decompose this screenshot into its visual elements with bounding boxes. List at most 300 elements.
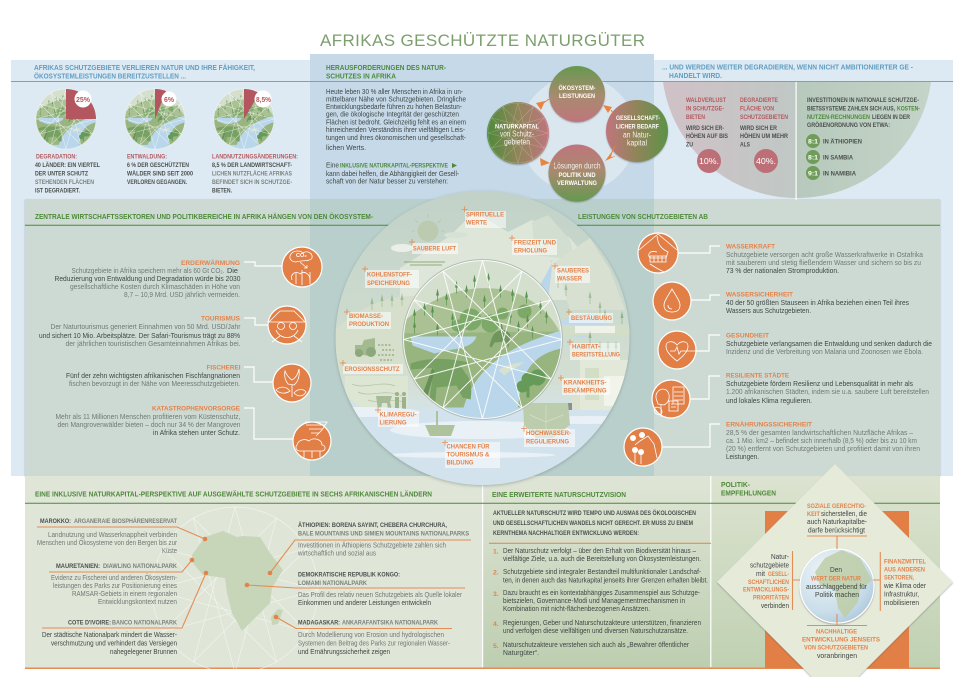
- label: climate regulation: [375, 407, 419, 427]
- sector: water security: 40 der 50 größten Stauseen in Afrika beziehen einen Teil ihres: [726, 298, 909, 307]
- case: Mauritania: [49, 558, 194, 606]
- body text: Flächen ist bedroht. Gleichzeitig fehlt es an einem: [326, 118, 466, 126]
- body text: [326, 87, 466, 186]
- case: DR Congo: Das Profil des relativ neuen Schutzgebiets als Quelle lokaler: [298, 590, 462, 599]
- ratio: Zambia: [806, 150, 853, 164]
- case: Morocco: ARGANERAIE BIOSPHÄRENRESERVAT: [74, 518, 177, 525]
- sector: climate change: [54, 247, 322, 299]
- recommendation: financing: mobilisieren: [884, 598, 919, 607]
- sector: disaster preparedness: [56, 406, 331, 460]
- case: Ivory Coast: COTE D'IVOIRE:: [68, 620, 111, 626]
- stat: degraded area 40%: [740, 97, 788, 173]
- label: pollination: [566, 309, 613, 323]
- sector: resilient cities: [652, 372, 929, 418]
- body text: mittelbarer Nähe von Schutzgebieten. Dringliche: [326, 95, 466, 104]
- case: DR Congo: [245, 572, 465, 607]
- case: Ethiopia: ÄTHIOPIEN: BORENA SAYINT, CHEBERA CHURCHURA,: [298, 522, 447, 529]
- right sectors column: [624, 233, 932, 466]
- item 2: 2.: [493, 570, 499, 576]
- item 3: Dazu braucht es ein kontextabhängiges Zusammenspiel aus Schutzge-: [503, 588, 700, 597]
- sector: climate change: Die: [227, 266, 238, 275]
- caption: deforestation: ENTWALDUNG:: [127, 154, 167, 160]
- sector: health: Schutzgebiete verlangsamen die Entwaldung und senken dadurch die: [726, 339, 932, 348]
- recommendation: development priorities: SCHAFTLICHEN: [748, 579, 789, 586]
- label: erosion protection: [340, 360, 403, 374]
- sector: hydropower: 73 % der nationalen Stromproduktion.: [726, 266, 839, 275]
- item 3: bietszielen, Governance-Modi und Managementmechanismen in: [503, 596, 685, 605]
- node: societal need: LICHER BEDARF: [616, 124, 659, 130]
- node: ecosystem services: ÖKOSYSTEM-: [558, 83, 596, 92]
- label: habitat: BEREITSTELLUNG: [572, 352, 620, 358]
- item 2: ten, in denen auch das Naturkapital jenseits ihrer Grenzen erhalten bleibt.: [503, 576, 708, 584]
- recommendation: financing: wie Klima oder: [883, 581, 926, 590]
- intro text: UND GESELLSCHAFTLICHEN WANDELS NICHT GERECHT. ER MUSS ZU EINEM: [493, 520, 693, 527]
- node: natural capital: NATURKAPITAL: [495, 124, 539, 131]
- map of Africa: [192, 531, 283, 631]
- heading: SCHUTZES IN AFRIKA: [326, 72, 396, 80]
- case: DR Congo: Einkommen und anderer Leistungen entwickeln: [298, 598, 431, 607]
- pie chart: deforestation 6%: [125, 89, 186, 150]
- label: climate regulation: KLIMAREGU-: [380, 412, 416, 419]
- inner circle landscape: [402, 260, 564, 422]
- case: Mauritania: DIAWLING NATIONALPARK: [103, 563, 177, 570]
- label: recreation: FREIZEIT UND: [514, 240, 556, 247]
- label: clean air: [409, 239, 458, 254]
- node: ecosystem services: LEISTUNGEN: [559, 93, 595, 100]
- globe: ausschlaggebend für: [806, 582, 867, 591]
- stat: forest loss 10%: WALDVERLUST: [686, 97, 726, 104]
- caption: land use change: [212, 152, 298, 194]
- caption: land use change: 8,5 % DER LANDWIRTSCHAFT-: [212, 162, 292, 169]
- label: biomass: PRODUKTION: [349, 321, 389, 328]
- sector: water security: [653, 282, 909, 320]
- icon: crops: [624, 428, 662, 466]
- label: disease control: KRANKHEITS-: [564, 380, 606, 387]
- label: tourism and education: BILDUNG: [446, 460, 474, 467]
- label: carbon storage: SPEICHERUNG: [367, 280, 410, 287]
- globe: Den: [830, 565, 842, 574]
- sector: water security: WASSERSICHERHEIT: [726, 292, 794, 299]
- stat: degraded area 40%: SCHUTZGEBIETEN: [740, 114, 788, 121]
- recommendation: social justice: sicherstellen, die: [821, 509, 867, 518]
- section heading: sectors: [25, 212, 940, 225]
- label: clean water: WASSER: [557, 276, 582, 283]
- item 4: [493, 618, 701, 635]
- sector: food security: ca. 1 Mio. km2 – befindet sich innerhalb (8,5 %) oder bis zu 10 km: [726, 436, 917, 445]
- sector: fisheries: Fünf der zehn wichtigsten afrikanischen Fischfangnationen: [66, 371, 240, 380]
- ratio: Ethiopia: IN ÄTHIOPIEN: [823, 138, 862, 146]
- sector: hydropower: Schutzgebiete versorgen acht große Wasserkraftwerke in Ostafrika: [726, 250, 924, 259]
- label: spiritual values: SPIRITUELLE: [466, 212, 505, 219]
- item 2: [493, 567, 708, 584]
- recommendation: sustainable development: [802, 614, 881, 660]
- ratio: Namibia: [806, 166, 857, 180]
- caption: land use change: LANDNUTZUNGSÄNDERUNGEN:: [212, 152, 298, 160]
- sector: disaster preparedness: in Afrika stehen unter Schutz.: [153, 428, 240, 437]
- globe: Politik machen: [815, 590, 859, 599]
- case: Madagascar: ANKARAFANTSIKA NATIONALPARK: [342, 620, 438, 626]
- label: spiritual values: [462, 206, 506, 228]
- node: policy solutions: VERWALTUNG: [557, 180, 597, 187]
- label: flood regulation: [521, 426, 575, 447]
- recommendation: development priorities: Natur-: [771, 552, 789, 561]
- recommendation: development priorities: schutzgebiete: [750, 560, 789, 570]
- node: natural capital: gebieten: [504, 138, 530, 146]
- stat: degraded area 40%: DEGRADIERTE: [740, 97, 779, 104]
- pie chart: deforestation 6%: 6%: [164, 97, 175, 104]
- body text: Entwicklungsbedarfe führen zu hohen Belastun-: [326, 102, 462, 111]
- label: habitat: HABITAT-: [572, 344, 600, 350]
- sector: food security: [624, 421, 920, 466]
- sector: resilient cities: RESILIENTE STÄDTE: [726, 372, 789, 380]
- case: Madagascar: Durch Modellierung von Erosion und hydrologischen: [298, 630, 444, 639]
- heading: HANDELT WIRD.: [669, 71, 722, 80]
- text: cost benefit: GRÖßENORDNUNG VON ETWA:: [807, 122, 890, 129]
- sector: resilient cities: Schutzgebiete fördern Resilienz und Lebensqualität in mehr als: [726, 379, 913, 388]
- text: cost benefit: INVESTITIONEN IN NATIONALE SCHUTZGE-: [807, 97, 919, 104]
- sector: health: [658, 331, 932, 369]
- sector: disaster preparedness: den Mangrovenwälder bieten – doch nur 34 % der Mangroven: [58, 420, 240, 429]
- text: cost benefit: LIEGEN IN DER: [872, 114, 910, 121]
- label: pollination: BESTÄUBUNG: [571, 314, 612, 322]
- recommendation: social justice: [807, 503, 867, 549]
- label: biomass: BIOMASSE-: [349, 313, 383, 320]
- case: Ethiopia: Investitionen in Äthiopiens Schutzgebiete zahlen sich: [298, 540, 446, 550]
- stat: forest loss 10%: [686, 97, 728, 173]
- sector: fisheries: [66, 364, 311, 402]
- case: Morocco: [37, 518, 207, 555]
- case: Madagascar: Systemen den Beitrag des Parks zur regionalen Wasser-: [298, 638, 450, 648]
- label: habitat: [567, 339, 620, 360]
- label: flood regulation: REGULIERUNG: [526, 438, 569, 445]
- case: Morocco: Küste: [162, 546, 177, 555]
- label: flood regulation: HOCHWASSER-: [526, 430, 571, 437]
- recommendation: social justice: KEIT: [807, 511, 820, 518]
- panel: policy recommendations: [717, 464, 953, 677]
- left sectors column: [39, 247, 331, 460]
- item 3: 3.: [493, 591, 499, 598]
- label: climate regulation: LIERUNG: [380, 420, 406, 427]
- label: biomass: [344, 309, 391, 329]
- central landscape circle: [334, 190, 631, 488]
- case: Ivory Coast: [42, 571, 208, 656]
- node: policy solutions: POLITIK UND: [558, 172, 596, 179]
- panel: loss of nature: [34, 63, 298, 194]
- sector: food security: 28,5 % der gesamten landwirtschaftlichen Nutzfläche Afrikas –: [726, 428, 914, 437]
- caption: land use change: BIETEN.: [212, 188, 232, 194]
- caption: degradation: IST DEGRADIERT.: [35, 188, 80, 194]
- arrows: [536, 99, 616, 166]
- sector: tourism: [39, 306, 306, 348]
- stat: degraded area 40%: ALS: [740, 142, 750, 148]
- recommendation: development priorities: PRIORITÄTEN: [753, 594, 789, 602]
- case: Ivory Coast: Der städtische Nationalpark mindert die Wasser-: [42, 630, 177, 639]
- item 3: [493, 588, 700, 613]
- case: Morocco: Landnutzung und Wasserknappheit verbinden: [48, 530, 177, 539]
- sector: disaster preparedness: Mehr als 11 Millionen Menschen profitieren vom Küstenschutz,: [56, 412, 240, 421]
- recommendation: development priorities: GESELL-: [768, 571, 789, 578]
- body text: lichen Werts.: [326, 143, 366, 152]
- case: DR Congo: LOMAMI NATIONALPARK: [298, 580, 367, 587]
- title: AFRIKAS GESCHÜTZTE NATURGÜTER: [320, 31, 645, 50]
- sector: fisheries: fischen bevorzugt in der Nähe von Meeresschutzgebieten.: [69, 379, 240, 388]
- heading: HERAUSFORDERUNGEN DES NATUR-: [326, 63, 447, 72]
- recommendation: social justice: darfe berücksichtigt: [808, 526, 866, 534]
- icon: tornado: [293, 422, 331, 460]
- ratio: Ethiopia: [806, 134, 862, 148]
- body text: hinreichenden Verständnis ihrer vielfältigen Leis-: [326, 125, 465, 134]
- recommendation: development priorities: verbinden: [761, 601, 789, 610]
- item 5: 5.: [493, 643, 499, 650]
- recommendation: social justice: SOZIALE GERECHTIG-: [807, 503, 866, 510]
- sector: disaster preparedness: KATASTROPHENVORSORGE: [152, 406, 240, 412]
- node: natural capital: [487, 102, 549, 164]
- sector: climate change: Reduzierung von Entwaldung und Degradation würde bis 2030: [54, 274, 240, 283]
- label: spiritual values: WERTE: [466, 220, 488, 227]
- sector: water security: Wassers aus Schutzgebieten.: [726, 306, 811, 315]
- text: cost benefit: BIETSSYSTEME ZAHLEN SICH AUS,: [807, 106, 895, 112]
- recommendation: development priorities: ENTWICKLUNGS-: [743, 586, 789, 594]
- recommendation: development priorities: mit: [756, 569, 766, 578]
- case: Morocco: MAROKKO:: [40, 518, 71, 525]
- sector: climate change: Schutzgebiete in Afrika speichern mehr als 60 Gt CO₂.: [72, 266, 224, 275]
- caption: degradation: 40 LÄNDER: EIN VIERTEL: [35, 162, 100, 169]
- item 4: und verfolgen diese vielfältigen und diversen Naturschutzansätze.: [503, 626, 688, 635]
- sector: hydropower: mit sauberem und stetig fließendem Wasser und sichern so bis zu: [726, 258, 921, 267]
- text: cost benefit: NUTZEN-RECHNUNGEN: [807, 114, 870, 121]
- recommendation: sustainable development: VON SCHUTZGEBIETEN: [804, 645, 868, 652]
- node: societal need: an Natur-: [623, 130, 651, 140]
- label: tourism and education: TOURISMUS &: [446, 452, 490, 459]
- icon: hydro dam: [638, 233, 678, 273]
- body text: gen, die ökologische Integrität der geschützten: [326, 110, 459, 118]
- pie chart: land use 8.5%: 8,5%: [256, 97, 272, 104]
- pie chart: degradation 25%: 25%: [76, 97, 91, 104]
- recommendation: sustainable development: voranbringen: [817, 651, 857, 660]
- caption: deforestation: WÄLDER SIND SEIT 2000: [127, 170, 193, 178]
- recommendation: sustainable development: ENTWICKLUNG JENSEITS: [802, 637, 881, 644]
- panel: expanded conservation vision: [489, 490, 711, 657]
- geometric background: [152, 507, 318, 673]
- case: Mauritania: MAURETANIEN:: [56, 563, 100, 570]
- sector: tourism: TOURISMUS: [201, 316, 240, 322]
- caption: degradation: DEGRADATION:: [36, 154, 77, 160]
- ratio: Namibia: IN NAMIBIA: [823, 170, 857, 178]
- recommendation: sustainable development: NACHHALTIGE: [816, 629, 858, 636]
- node: societal need: [606, 100, 668, 162]
- case: Ivory Coast: nahegelegener Brunnen: [110, 647, 177, 656]
- icon: CO2 forest: [282, 247, 322, 287]
- globe: [800, 549, 874, 623]
- sector: food security: Leistungen.: [726, 452, 759, 461]
- label: clean air: SAUBERE LUFT: [413, 246, 456, 253]
- stat: degraded area 40%: 40%.: [756, 156, 776, 166]
- heading: [326, 63, 447, 80]
- sector: climate change: 8,7 – 10,9 Mrd. USD jährlich vermeiden.: [124, 290, 240, 299]
- case: Ivory Coast: BANCO NATIONALPARK: [112, 620, 177, 626]
- item 3: Kombination mit nicht-flächenbezogenen Ansätzen.: [503, 604, 650, 613]
- item 5: Naturschutzakteure verstehen sich auch als „Bewahrer öffentlicher: [503, 640, 689, 649]
- recommendation: development priorities: [743, 551, 800, 610]
- case: Mauritania: leistungen des Parks zur Positionierung eines: [53, 581, 177, 590]
- panel: challenges: [326, 63, 668, 202]
- label: clean water: [552, 263, 590, 283]
- label: erosion protection: EROSIONSSCHUTZ: [344, 366, 400, 373]
- orange square: [765, 511, 909, 668]
- recommendation: financing: SEKTOREN,: [884, 574, 914, 582]
- item 2: Schutzgebiete sind integraler Bestandteil multifunktionaler Landschaf-: [503, 567, 701, 576]
- body text: kann dabei helfen, die Abhängigkeit der Gesell-: [326, 169, 459, 178]
- item 1: [493, 546, 701, 563]
- caption: land use change: BEFINDET SICH IN SCHUTZGE-: [212, 179, 292, 186]
- stat: forest loss 10%: BIETEN: [686, 114, 705, 121]
- item 5: [493, 640, 689, 657]
- body text: schaft von der Natur besser zu verstehen:: [326, 176, 448, 186]
- caption: land use change: LICHEN NUTZFLÄCHE AFRIKAS: [212, 170, 292, 178]
- caption: degradation: STEHENDEN FLÄCHEN: [35, 179, 94, 186]
- body text: Eine: [326, 160, 339, 170]
- sector: climate change: gesellschaftliche Kosten durch Klimaschäden in Höhe von: [70, 282, 240, 291]
- case: Mauritania: RAMSAR-Gebiets in einem regionalen: [72, 589, 177, 598]
- node: natural capital: von Schutz-: [500, 130, 534, 138]
- ratio: Zambia: IN SAMBIA: [823, 154, 853, 162]
- node: policy solutions: Lösungen durch: [554, 162, 600, 171]
- section heading: natural capital perspective: EINE INKLUSIVE NATURKAPITAL-PERSPEKTIVE AUF AUSGEWÄHLTE SCHUTZGEBIETE IN SECHS AFRIKANISCHEN LÄNDERN: [35, 490, 432, 499]
- item 4: Regierungen, Geber und Naturschutzakteure unterstützen, finanzieren: [503, 618, 701, 627]
- case: Madagascar: und Ernährungssicherheit zeigen: [298, 647, 390, 656]
- recommendation: financing: AUS ANDEREN: [884, 567, 925, 574]
- intro text: KERNTHEMA NACHHALTIGER ENTWICKLUNG WERDEN:: [493, 530, 639, 537]
- heading: [662, 62, 914, 80]
- label: recreation: ERHOLUNG: [514, 248, 547, 255]
- icon: city and trees: [652, 380, 690, 418]
- stat: degraded area 40%: WIRD SICH ER: [740, 125, 777, 132]
- case: DR Congo: DEMOKRATISCHE REPUBLIK KONGO:: [298, 572, 400, 579]
- heading: [721, 480, 776, 498]
- label: disease control: BEKÄMPFUNG: [564, 387, 606, 395]
- recommendation: financing: [873, 552, 926, 611]
- case: Ethiopia: BALE MOUNTAINS UND SIMIEN MOUNTAINS NATIONALPARKS: [298, 531, 469, 538]
- heading: EINE ERWEITERTE NATURSCHUTZVISION: [492, 490, 626, 499]
- sector: food security: ERNÄHRUNGSSICHERHEIT: [726, 421, 813, 429]
- sector: hydropower: [638, 233, 924, 275]
- section heading: sectors: ZENTRALE WIRTSCHAFTSSEKTOREN UND POLITIKBEREICHE IN AFRIKA HÄNGEN VON DEN ÖKOSYSTEM-: [35, 212, 374, 221]
- recommendation: financing: Infrastruktur,: [884, 590, 919, 599]
- text: cost benefit: KOSTEN-: [897, 106, 920, 112]
- half circle background: [663, 82, 931, 200]
- case: Madagascar: MADAGASKAR:: [298, 620, 340, 626]
- pie chart: land use 8.5%: [214, 89, 275, 150]
- sector: health: GESUNDHEIT: [726, 333, 770, 340]
- outer landscape: [336, 212, 630, 485]
- cycle diagram: [487, 66, 668, 202]
- diamond: [717, 464, 953, 677]
- stat: degraded area 40%: HÖHEN UM MEHR: [740, 133, 788, 140]
- node: societal need: kapital: [627, 138, 647, 148]
- sector: tourism: und sichert 10 Mio. Arbeitsplätze. Der Safari-Tourismus trägt zu 88%: [39, 331, 240, 340]
- node: policy solutions: [548, 144, 606, 202]
- heading: ... UND WERDEN WEITER DEGRADIEREN, WENN NICHT AMBITIONIERTER GE -: [662, 62, 914, 72]
- sector: food security: (20 %) entfernt von Schutzgebieten und profitiert damit von ihren: [726, 444, 920, 453]
- stat: forest loss 10%: 10%.: [699, 156, 719, 166]
- label: tourism and education: CHANCEN FÜR: [446, 441, 490, 450]
- caption: degradation: DER UNTER SCHUTZ: [35, 170, 88, 178]
- heading: EMPFEHLUNGEN: [721, 489, 776, 498]
- case: Morocco: Menschen und Ökosysteme von den Bergen bis zur: [37, 538, 177, 547]
- case: Ivory Coast: verschmutzung und verhindert das Versiegen: [51, 638, 177, 648]
- globe: WERT DER NATUR: [811, 576, 861, 582]
- heading: [34, 63, 255, 80]
- sector: resilient cities: 1.200 afrikanischen Städten, indem sie u.a. saubere Luft bereitstellen: [726, 387, 929, 396]
- ratio: Namibia: 9:1: [808, 170, 818, 178]
- heading: POLITIK-: [721, 480, 751, 489]
- panel: further degradation: [662, 62, 931, 200]
- heading: ÖKOSYSTEMLEISTUNGEN BEREITZUSTELLEN ...: [34, 72, 186, 80]
- icon: heart: [658, 331, 696, 369]
- caption: deforestation: 6 % DER GESCHÜTZTEN: [127, 162, 189, 169]
- item 4: 4.: [493, 621, 499, 628]
- sector: fisheries: FISCHEREI: [206, 364, 241, 372]
- sector: tourism: Der Naturtourismus generiert Einnahmen von 50 Mrd. USD/Jahr: [50, 322, 241, 331]
- stat: forest loss 10%: ZU: [686, 142, 693, 148]
- case: Mauritania: Entwicklungskontext nutzen: [98, 597, 177, 606]
- node: ecosystem services: [549, 66, 605, 122]
- ratio: Ethiopia: 8:1: [808, 138, 818, 146]
- case: Ethiopia: wirtschaftlich und sozial aus: [297, 548, 376, 558]
- sector: resilient cities: und lokales Klima regulieren.: [726, 396, 812, 405]
- caption: deforestation: VERLOREN GEGANGEN.: [127, 179, 187, 186]
- icon: fish: [273, 364, 311, 402]
- case: Ethiopia: [268, 522, 471, 575]
- node: societal need: GESELLSCHAFT-: [616, 115, 660, 122]
- label: clean water: SAUBERES: [557, 267, 590, 274]
- sector: tourism: der jährlichen touristischen Gesamteinnahmen Afrikas bei.: [66, 339, 240, 348]
- sector: health: Inzidenz und die Verbreitung von Malaria und Zoonosen wie Ebola.: [726, 347, 923, 356]
- intro text: AKTUELLER NATURSCHUTZ WIRD TEMPO UND AUSMAß DES ÖKOLOGISCHEN: [493, 510, 696, 517]
- heading: AFRIKAS SCHUTZGEBIETE VERLIEREN NATUR UND IHRE FÄHIGKEIT,: [34, 63, 255, 72]
- case: Mauritania: Evidenz zu Fischerei und anderen Ökosystem-: [51, 573, 177, 582]
- label: tourism and education: [442, 440, 500, 468]
- label: recreation: [509, 235, 557, 255]
- icon: water drop: [653, 282, 691, 320]
- sector: hydropower: WASSERKRAFT: [726, 244, 776, 251]
- item 1: vielfältige Ziele, u.a. auch die Bereitstellung von Ökosystemleistungen.: [503, 554, 701, 563]
- sector: climate change: ERDERWÄRMUNG: [181, 259, 240, 267]
- label: carbon storage: [362, 266, 419, 288]
- label: disease control: [558, 375, 610, 395]
- stat: forest loss 10%: HÖHEN AUF BIS: [686, 133, 728, 140]
- label: carbon storage: KOHLENSTOFF-: [367, 272, 412, 279]
- ratio: Zambia: 8:1: [808, 154, 818, 162]
- item 1: Der Naturschutz verfolgt – über den Erhalt von Biodiversität hinaus –: [503, 546, 697, 555]
- stat: forest loss 10%: WIRD SICH ER-: [686, 125, 724, 132]
- caption: deforestation: [127, 154, 193, 186]
- panel: Africa map with six countries: [37, 507, 471, 673]
- icon: CO2 forest: CO₂: [296, 253, 307, 259]
- section heading: sectors: LEISTUNGEN VON SCHUTZGEBIETEN AB: [578, 212, 708, 221]
- item 1: 1.: [493, 548, 499, 556]
- recommendation: financing: FINANZMITTEL: [884, 558, 926, 565]
- caption: degradation: [35, 154, 100, 194]
- body text: tungen und ihres ökonomischen und gesellschaft-: [326, 133, 466, 142]
- body text: INKLUSIVE NATURKAPITAL-PERSPEKTIVE: [340, 164, 448, 170]
- intro text: [489, 510, 711, 543]
- stat: degraded area 40%: FLÄCHE VON: [740, 104, 774, 112]
- body text: Heute leben 30 % aller Menschen in Afrika in un-: [326, 87, 463, 96]
- case: Madagascar: [274, 615, 452, 656]
- pie chart: degradation 25%: [36, 89, 97, 150]
- item 5: Naturgüter“.: [503, 648, 539, 657]
